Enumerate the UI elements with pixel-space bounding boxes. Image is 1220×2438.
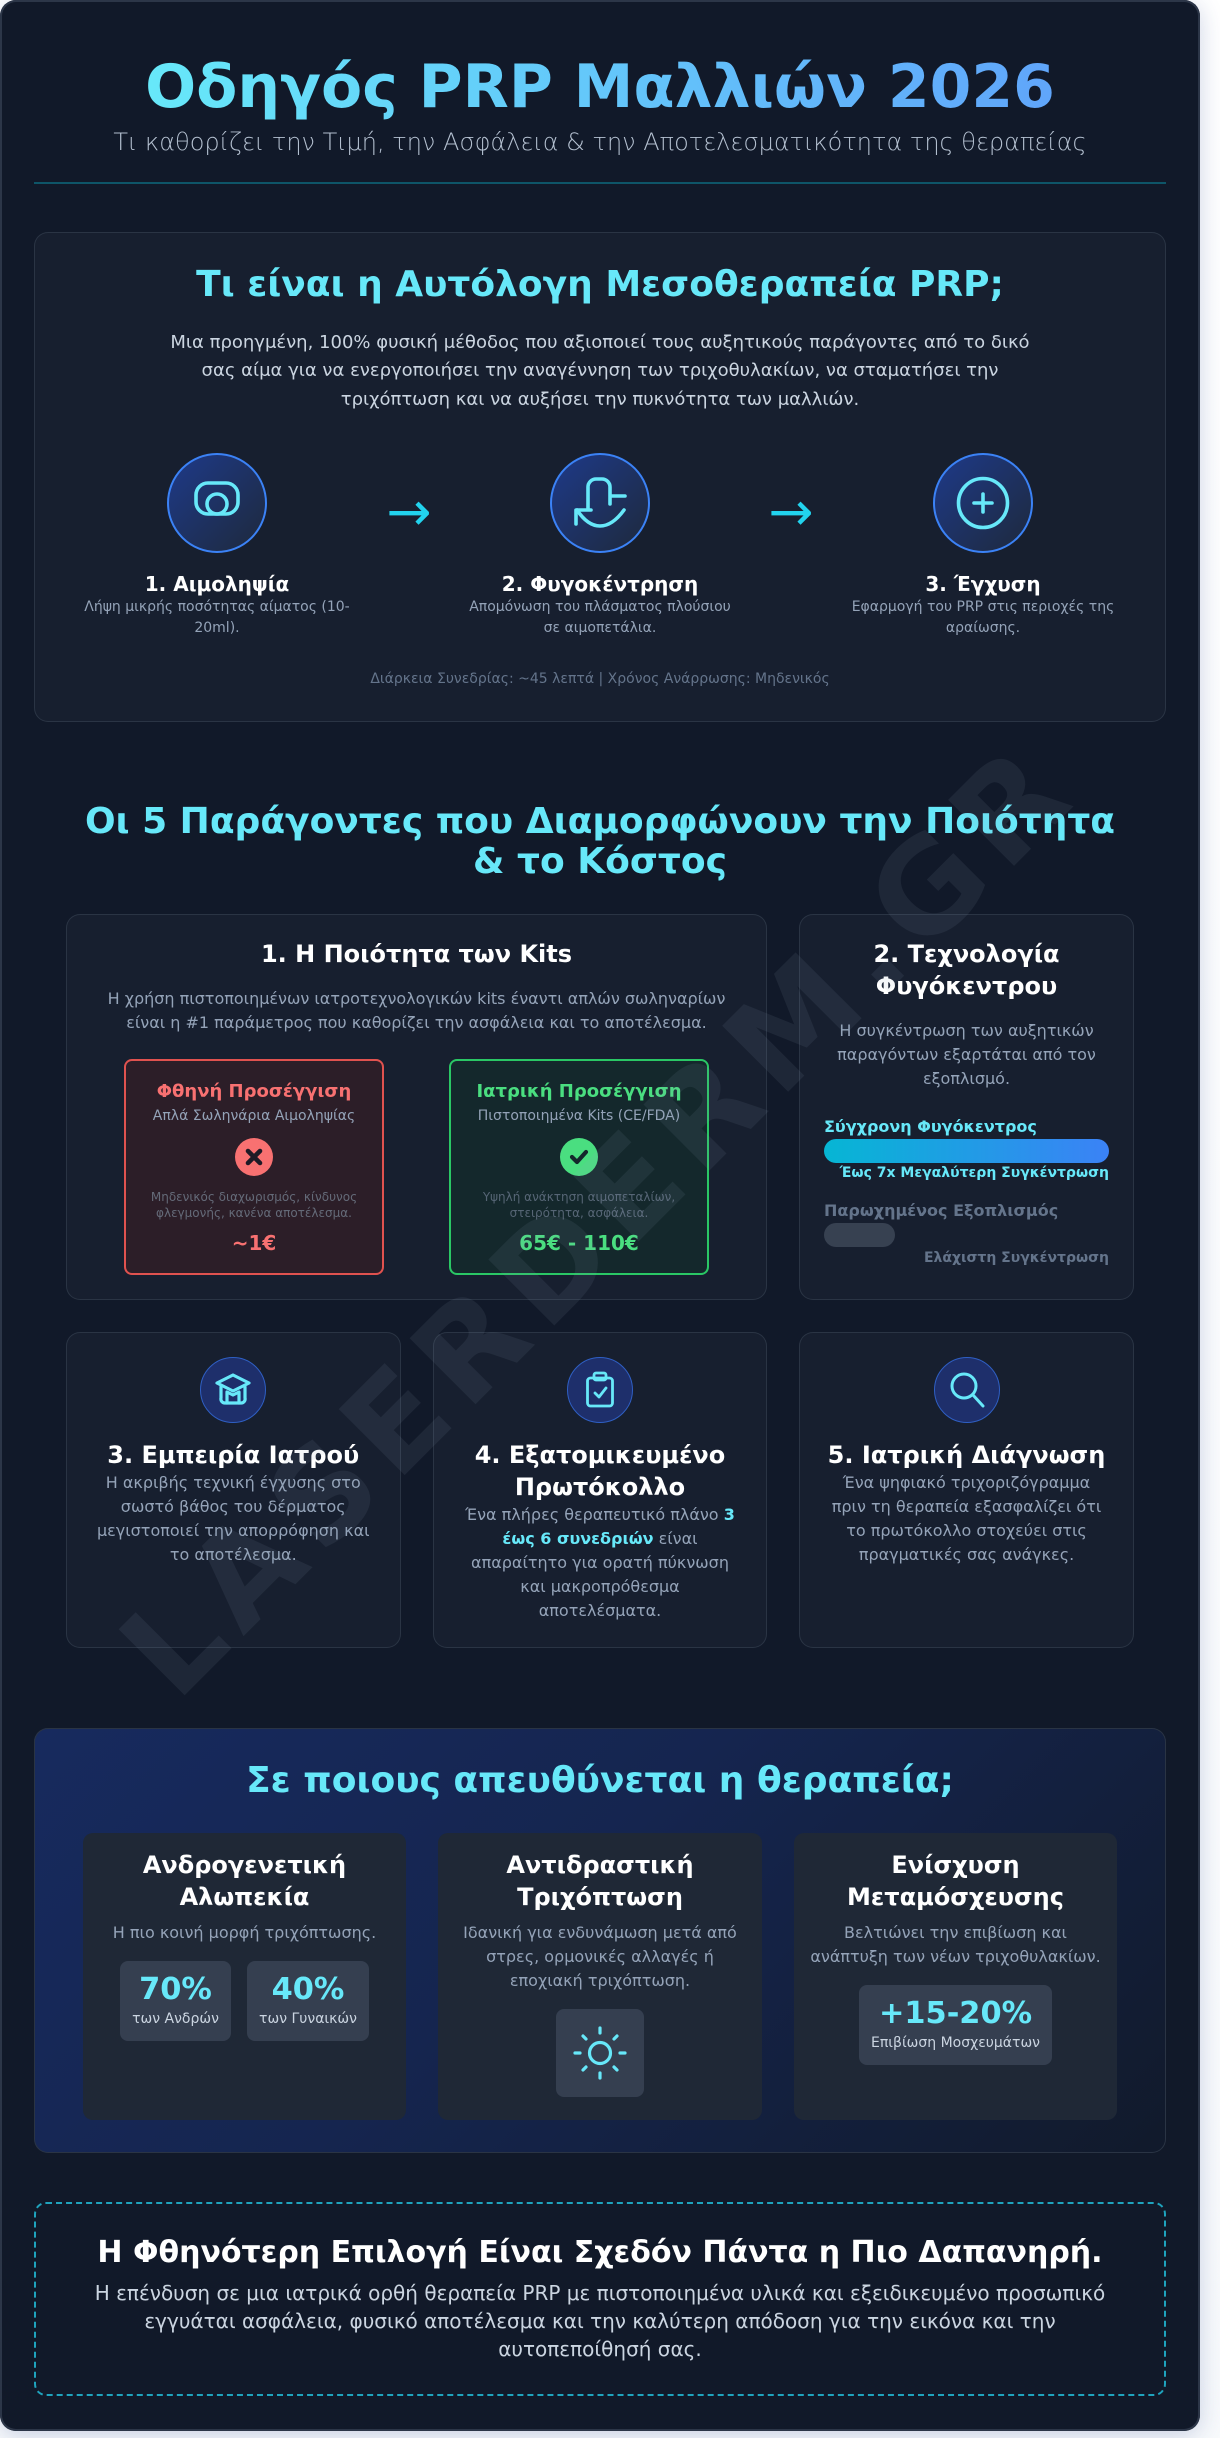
icon: search — [934, 1357, 1000, 1423]
step text — [469, 598, 731, 636]
step text — [852, 598, 1114, 636]
price: 65€ - 110€ — [519, 1231, 639, 1255]
step title: 1. Αιμοληψία — [145, 572, 289, 596]
title: Οδηγός PRP Μαλλιών 2026 — [145, 52, 1055, 122]
icon: clipboard — [567, 1357, 633, 1423]
factor text: μεγιστοποιεί την απορρόφηση και — [97, 1521, 370, 1540]
factor text: απαραίτητο για ορατή πύκνωση — [471, 1553, 729, 1572]
factor title: Πρωτόκολλο — [515, 1473, 685, 1501]
icon: graduation cap — [200, 1357, 266, 1423]
step 3 — [852, 453, 1114, 636]
caption: των Γυναικών — [259, 2011, 357, 2027]
factor text: το αποτέλεσμα. — [170, 1545, 297, 1564]
factor title: Φυγόκεντρου — [876, 972, 1057, 1000]
factor title: 2. Τεχνολογία — [873, 940, 1060, 968]
section heading: five factors: Οι 5 Παράγοντες που Διαμορφώνουν την Ποιότητα — [85, 801, 1115, 842]
card title: Μεταμόσχευσης — [847, 1883, 1064, 1911]
section heading: five factors: & το Κόστος — [473, 841, 727, 882]
callout text: εγγυάται ασφάλεια, φυσικό αποτέλεσμα και την καλύτερη απόδοση για την εικόνα και την — [144, 2309, 1056, 2333]
card text: Ιδανική για ενδυνάμωση μετά από — [463, 1923, 737, 1942]
header — [113, 52, 1087, 156]
callout text — [95, 2281, 1105, 2361]
panel: factor 2 centrifuge — [799, 914, 1134, 1300]
factor text: αποτελέσματα. — [539, 1601, 661, 1620]
card text: στειρότητα, ασφάλεια. — [510, 1206, 648, 1220]
factor title — [475, 1441, 725, 1501]
card title: Ανδρογενετική — [143, 1851, 346, 1879]
factor text: πραγματικές σας ανάγκες. — [859, 1545, 1074, 1564]
card title — [847, 1851, 1064, 1911]
card: reactive — [438, 1833, 762, 2120]
card text — [810, 1923, 1101, 1966]
stat men — [120, 1961, 231, 2041]
icon: injection — [933, 453, 1033, 553]
panel: factor 4 — [433, 1332, 767, 1648]
card text: Η πιο κοινή μορφή τριχόπτωσης. — [113, 1923, 376, 1942]
price: ~1€ — [232, 1231, 276, 1255]
label: Παρωχημένος Εξοπλισμός — [824, 1201, 1058, 1220]
intro text — [170, 332, 1030, 410]
factor text: έως 6 συνεδριών είναι — [502, 1529, 698, 1548]
card title: Ενίσχυση — [891, 1851, 1020, 1879]
label: Σύγχρονη Φυγόκεντρος — [824, 1117, 1037, 1136]
card: androgenetic — [83, 1833, 406, 2120]
factor text: Ένα πλήρες θεραπευτικό πλάνο 3 — [465, 1505, 735, 1524]
intro text: τριχόπτωση και να αυξήσει την πυκνότητα των μαλλιών. — [341, 389, 859, 410]
intro text: Μια προηγμένη, 100% φυσική μέθοδος που αξιοποιεί τους αυξητικούς παράγοντες από το δικό — [170, 332, 1030, 352]
watermark: LASERDERM.GR — [93, 712, 1106, 1725]
stat transplant — [859, 1985, 1052, 2065]
step text: αραίωσης. — [946, 620, 1020, 636]
subtitle: Τι καθορίζει την Τιμή, την Ασφάλεια & την Αποτελεσματικότητα της θεραπείας — [113, 128, 1087, 156]
panel: factor 5 — [799, 1332, 1134, 1648]
card title: Αλωπεκία — [180, 1883, 309, 1911]
icon: cross — [235, 1138, 273, 1176]
card text — [483, 1190, 675, 1220]
card: medical approach — [449, 1059, 709, 1275]
callout text: Η επένδυση σε μια ιατρικά ορθή θεραπεία PRP με πιστοποιημένα υλικά και εξειδικευμένο προσωπικό — [95, 2281, 1105, 2305]
factor title: 1. Η Ποιότητα των Kits — [261, 940, 572, 968]
card title: Τριχόπτωση — [517, 1883, 683, 1911]
section heading: five factors — [85, 801, 1115, 882]
closing callout — [34, 2202, 1166, 2396]
value: +15-20% — [879, 1996, 1032, 2031]
bar note: Έως 7x Μεγαλύτερη Συγκέντρωση — [840, 1165, 1109, 1181]
step 2 — [469, 453, 731, 636]
bar: modern — [824, 1139, 1109, 1163]
step text: Εφαρμογή του PRP στις περιοχές της — [852, 598, 1114, 614]
factor text: πριν τη θεραπεία εξασφαλίζει ότι — [832, 1497, 1101, 1516]
card title — [143, 1851, 346, 1911]
heading: Τι είναι η Αυτόλογη Μεσοθεραπεία PRP; — [196, 264, 1004, 305]
card: cheap approach — [124, 1059, 384, 1275]
card text: φλεγμονής, κανένα αποτέλεσμα. — [156, 1206, 352, 1220]
card text: ανάπτυξη των νέων τριχοθυλακίων. — [810, 1947, 1101, 1966]
panel: factor 3 — [66, 1332, 400, 1648]
card title: Ιατρική Προσέγγιση — [476, 1081, 682, 1102]
stat women — [247, 1961, 369, 2041]
bar note: Ελάχιστη Συγκέντρωση — [924, 1250, 1109, 1266]
factor text: Ένα ψηφιακό τριχοριζόγραμμα — [843, 1473, 1090, 1492]
card text: Μηδενικός διαχωρισμός, κίνδυνος — [151, 1190, 357, 1204]
factor text — [465, 1505, 735, 1620]
value: 70% — [139, 1972, 212, 2007]
icon: blood draw — [167, 453, 267, 553]
card text: εποχιακή τριχόπτωση. — [510, 1971, 690, 1990]
panel: audience — [34, 1728, 1166, 2153]
callout title: Η Φθηνότερη Επιλογή Είναι Σχεδόν Πάντα η Πιο Δαπανηρή. — [97, 2235, 1103, 2270]
step text: σε αιμοπετάλια. — [544, 620, 656, 636]
step text — [84, 598, 350, 636]
factor title: 4. Εξατομικευμένο — [475, 1441, 725, 1469]
factor title — [873, 940, 1060, 1000]
step title: 2. Φυγοκέντρηση — [502, 572, 698, 596]
factor text: σωστό βάθος του δέρματος — [121, 1497, 346, 1516]
card title — [506, 1851, 694, 1911]
icon: centrifuge — [550, 453, 650, 553]
session note: Διάρκεια Συνεδρίας: ~45 λεπτά | Χρόνος Ανάρρωσης: Μηδενικός — [370, 671, 830, 687]
step text: Λήψη μικρής ποσότητας αίματος (10- — [84, 598, 350, 614]
factor title: 5. Ιατρική Διάγνωση — [828, 1441, 1105, 1469]
factor text: Η συγκέντρωση των αυξητικών — [839, 1021, 1094, 1040]
step title: 3. Έγχυση — [925, 572, 1041, 596]
value: 40% — [272, 1972, 344, 2007]
card: transplant — [794, 1833, 1117, 2120]
step 1 — [84, 453, 350, 636]
factor text: Η χρήση πιστοποιημένων ιατροτεχνολογικών kits έναντι απλών σωληναρίων — [108, 989, 725, 1008]
factor text — [97, 1473, 370, 1564]
panel: factor 1 kits — [66, 914, 767, 1300]
factor text: και μακροπρόθεσμα — [520, 1577, 680, 1596]
factor text: παραγόντων εξαρτάται από τον — [837, 1045, 1096, 1064]
factor text — [837, 1021, 1096, 1088]
card title: Αντιδραστική — [506, 1851, 694, 1879]
card subtitle: Πιστοποιημένα Kits (CE/FDA) — [478, 1108, 680, 1124]
callout text: αυτοπεποίθησή σας. — [498, 2337, 702, 2361]
heading: Σε ποιους απευθύνεται η θεραπεία; — [246, 1760, 954, 1801]
card text: στρες, ορμονικές αλλαγές ή — [486, 1947, 714, 1966]
factor text: εξοπλισμό. — [923, 1069, 1010, 1088]
panel: what is PRP — [34, 232, 1166, 722]
step text: Απομόνωση του πλάσματος πλούσιου — [469, 598, 731, 614]
factor title: 3. Εμπειρία Ιατρού — [107, 1441, 359, 1469]
card text: Βελτιώνει την επιβίωση και — [844, 1923, 1067, 1942]
intro text: σας αίμα για να ενεργοποιήσει την αναγέννηση των τριχοθυλακίων, να σταματήσει την — [202, 360, 998, 381]
step text: 20ml). — [194, 620, 240, 636]
card text — [463, 1923, 737, 1990]
card title: Φθηνή Προσέγγιση — [157, 1081, 351, 1102]
card text — [151, 1190, 357, 1220]
caption: Επιβίωση Μοσχευμάτων — [871, 2035, 1040, 2051]
caption: των Ανδρών — [132, 2011, 219, 2027]
factor text — [832, 1473, 1101, 1564]
factor text — [108, 989, 725, 1032]
bar: outdated — [824, 1223, 895, 1247]
icon: check — [560, 1138, 598, 1176]
arrow: → — [386, 480, 432, 543]
arrow: → — [768, 480, 814, 543]
factor text: Η ακριβής τεχνική έγχυσης στο — [106, 1473, 361, 1492]
icon: sun — [556, 2009, 644, 2097]
factor text: είναι η #1 παράμετρος που καθορίζει την ασφάλεια και το αποτέλεσμα. — [126, 1013, 707, 1032]
card text: Υψηλή ανάκτηση αιμοπεταλίων, — [483, 1190, 675, 1204]
card subtitle: Απλά Σωληνάρια Αιμοληψίας — [153, 1108, 355, 1124]
factor text: το πρωτόκολλο στοχεύει στις — [846, 1521, 1087, 1540]
